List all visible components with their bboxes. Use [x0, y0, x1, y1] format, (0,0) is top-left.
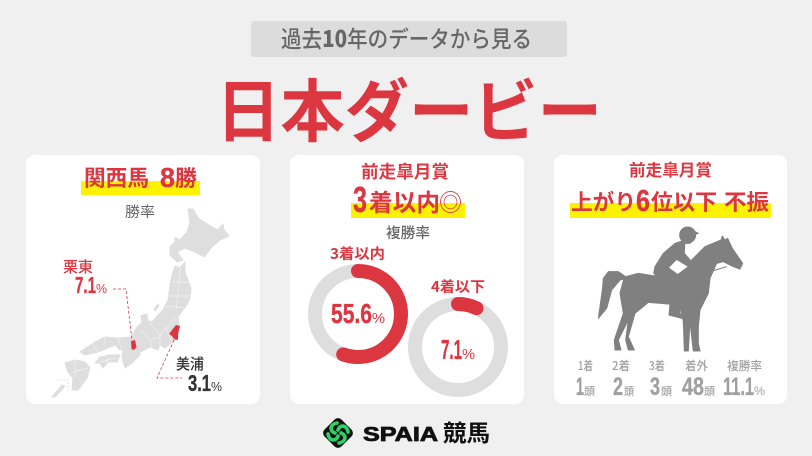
donut chart: 4th or lower: %: [462, 346, 475, 363]
stats: 1st place: 頭: [584, 383, 595, 399]
label: place rate: 複勝率: [386, 222, 430, 243]
callout: Miho: [176, 353, 222, 396]
stats: 1st place: 1: [576, 373, 584, 401]
callout: Miho: %: [211, 379, 222, 394]
callout: Ritto: [63, 256, 107, 298]
donut chart: 4th or lower: 4着以下: [431, 276, 485, 297]
heading: slump: 不振: [724, 185, 769, 217]
donut chart: 4th or lower: [415, 276, 501, 390]
heading: top 3 double circle: [351, 179, 465, 220]
icon: horse and jockey silhouette: [598, 227, 743, 351]
panel: last-3F 6th or lower: [554, 155, 787, 404]
stats: place rate: 複勝率: [727, 357, 762, 374]
heading: previous race: 前走皐月賞: [629, 157, 712, 181]
donut chart: top 3: %: [372, 310, 385, 327]
stats: 3rd place: 3着: [649, 357, 665, 374]
heading: slump: 6: [636, 183, 650, 218]
logo: SPAIA Keiba: 競馬: [443, 414, 490, 448]
stats: 3rd place: 頭: [661, 383, 672, 399]
donut chart: top 3: 3着以内: [330, 243, 385, 264]
heading: slump: 位以下: [651, 185, 717, 217]
stats: 2nd place: 頭: [624, 383, 634, 399]
stats: out of top 3: [682, 357, 715, 401]
heading: slump: 上がり: [571, 185, 636, 217]
title: 日本ダービー: [216, 57, 602, 156]
heading: top 3 double circle: 着以内: [369, 183, 440, 218]
stats: 3rd place: 3: [650, 373, 660, 401]
label: win rate: 勝率: [125, 201, 155, 222]
donut chart: top 3: [315, 243, 401, 357]
heading: Kansai 8 wins: 勝: [175, 161, 197, 193]
heading: Kansai 8 wins: 8: [160, 162, 175, 193]
heading: Kansai 8 wins: 関西馬: [84, 161, 149, 193]
heading: top 3 double circle: 3: [353, 179, 367, 220]
callout: Miho: 3.1: [188, 370, 211, 396]
stats: 2nd place: 2: [613, 373, 623, 401]
stats: out of top 3: 頭: [704, 383, 715, 399]
heading: slump: [570, 183, 771, 218]
map of Japan: [52, 209, 229, 397]
panel: previous Satsuki Sho top 3: [290, 155, 524, 404]
callout: Ritto: 栗東: [63, 256, 93, 277]
stats: 1st place: [576, 357, 595, 401]
icon: SPAIA emblem: [321, 416, 355, 450]
callout: Ritto: %: [96, 281, 107, 296]
callout: Ritto: 7.1: [75, 272, 96, 298]
logo: SPAIA Keiba: [321, 414, 490, 450]
panel: Kansai horses: [26, 155, 260, 404]
heading: previous race: 前走皐月賞: [361, 159, 449, 184]
stats: 2nd place: 2着: [612, 357, 630, 374]
heading: top 3 double circle: ◎: [439, 183, 462, 218]
stats: out of top 3: 48: [682, 373, 704, 401]
icon: Ritto marker: [131, 340, 136, 350]
stats: 1st place: 1着: [578, 357, 593, 374]
donut chart: top 3: 55.6: [331, 298, 372, 329]
heading: Kansai 8 wins: [81, 161, 200, 195]
stats: place rate: [723, 357, 765, 401]
logo: SPAIA Keiba: SPAIA: [363, 424, 438, 446]
subtitle pill: 過去10年のデータから見る: [281, 20, 532, 54]
stats: place rate: %: [754, 384, 765, 398]
stats: 2nd place: [612, 357, 634, 401]
callout: Miho: 美浦: [176, 353, 204, 374]
icon: Miho marker: [169, 325, 180, 340]
stats: place rate: 11.1: [723, 373, 754, 401]
stats: out of top 3: 着外: [685, 357, 708, 374]
donut chart: 4th or lower: 7.1: [441, 334, 462, 365]
stats: 3rd place: [649, 357, 672, 401]
